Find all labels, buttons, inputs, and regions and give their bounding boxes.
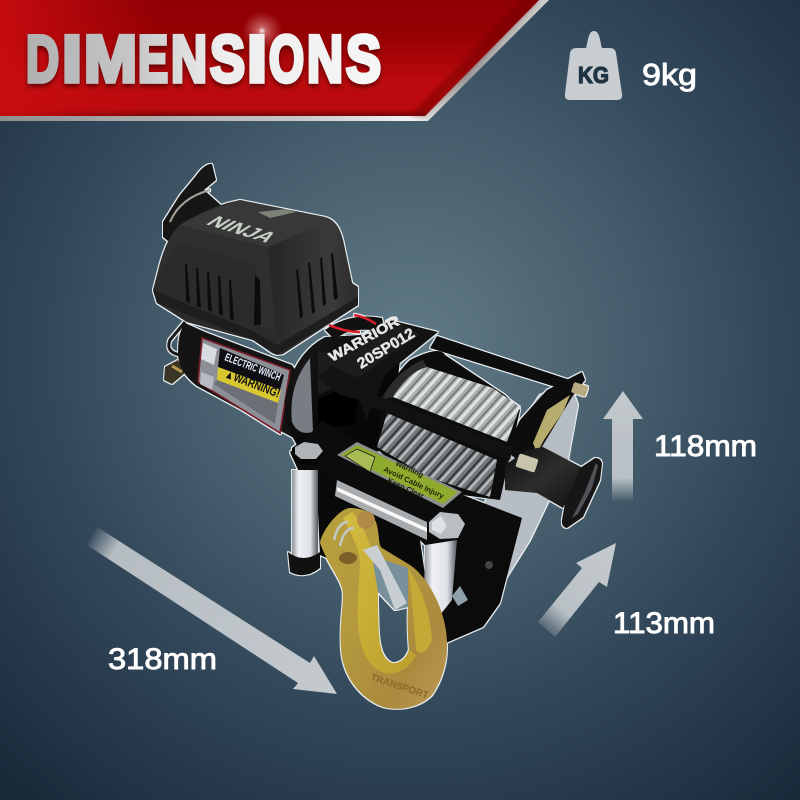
right chrome roller [424,540,457,615]
warning sticker: Avoid Cable Injury [382,465,446,501]
steel cable lower [377,413,497,497]
control box cover [153,200,358,355]
motor body [178,323,302,440]
arrow: length [87,527,337,694]
terminal wire [164,322,195,384]
hook eye [334,511,375,564]
dark cable wrap [381,360,427,400]
horizontal chrome roller [335,480,427,540]
title: S [346,22,381,96]
title: N [171,22,207,96]
frame nuts [515,382,589,473]
title: S [210,22,245,96]
icon: kg weight [565,31,622,100]
brand text: WARRIOR [326,314,402,365]
title: D [26,22,59,96]
logo [200,209,296,246]
top plate with brand [317,314,438,420]
vent slots [185,253,338,325]
drum flange rear [378,351,520,500]
rear silver plate [470,383,578,580]
front frame bar [362,391,513,460]
product: electric winch [153,164,602,709]
logo text: NINJA [200,214,282,246]
height label: 118mm [654,430,757,463]
banner: red title ribbon [0,0,549,121]
clutch knob [505,447,602,528]
hook inner ridge [343,512,416,673]
connector flap [163,164,222,245]
title: I [62,22,82,96]
mounting bracket [408,518,522,643]
motor label text: ELECTRIC WINCH [223,352,282,384]
beak highlight [408,568,432,653]
weight value: 9kg [642,57,697,92]
clevis hook [320,508,447,709]
gap behind latch [372,556,408,610]
hook stamping: TRANSPORT [369,672,430,701]
warning sticker: Keep Clear [386,476,426,500]
bolts [292,442,465,539]
fairlead plate [290,420,522,610]
arrow: width [538,543,616,637]
rear frame bar [430,336,570,389]
warning text: ▲WARNING! [223,367,282,401]
gear housing [285,320,400,455]
kg label: KG [578,62,609,88]
title: O [269,22,304,96]
title: E [138,22,168,96]
right flange [505,372,585,462]
sticker text: Warning [394,459,425,480]
title: N [307,22,343,96]
width label: 113mm [613,607,715,640]
safety latch [363,545,407,610]
model text: 20SP012 [354,325,418,372]
length label: 318mm [108,643,217,676]
power wires [325,315,385,340]
left chrome roller [288,470,320,575]
steel cable upper [393,367,520,442]
title: I [247,22,267,96]
arrow: height [603,391,643,502]
title: M [84,22,137,96]
warning sticker [337,442,462,508]
